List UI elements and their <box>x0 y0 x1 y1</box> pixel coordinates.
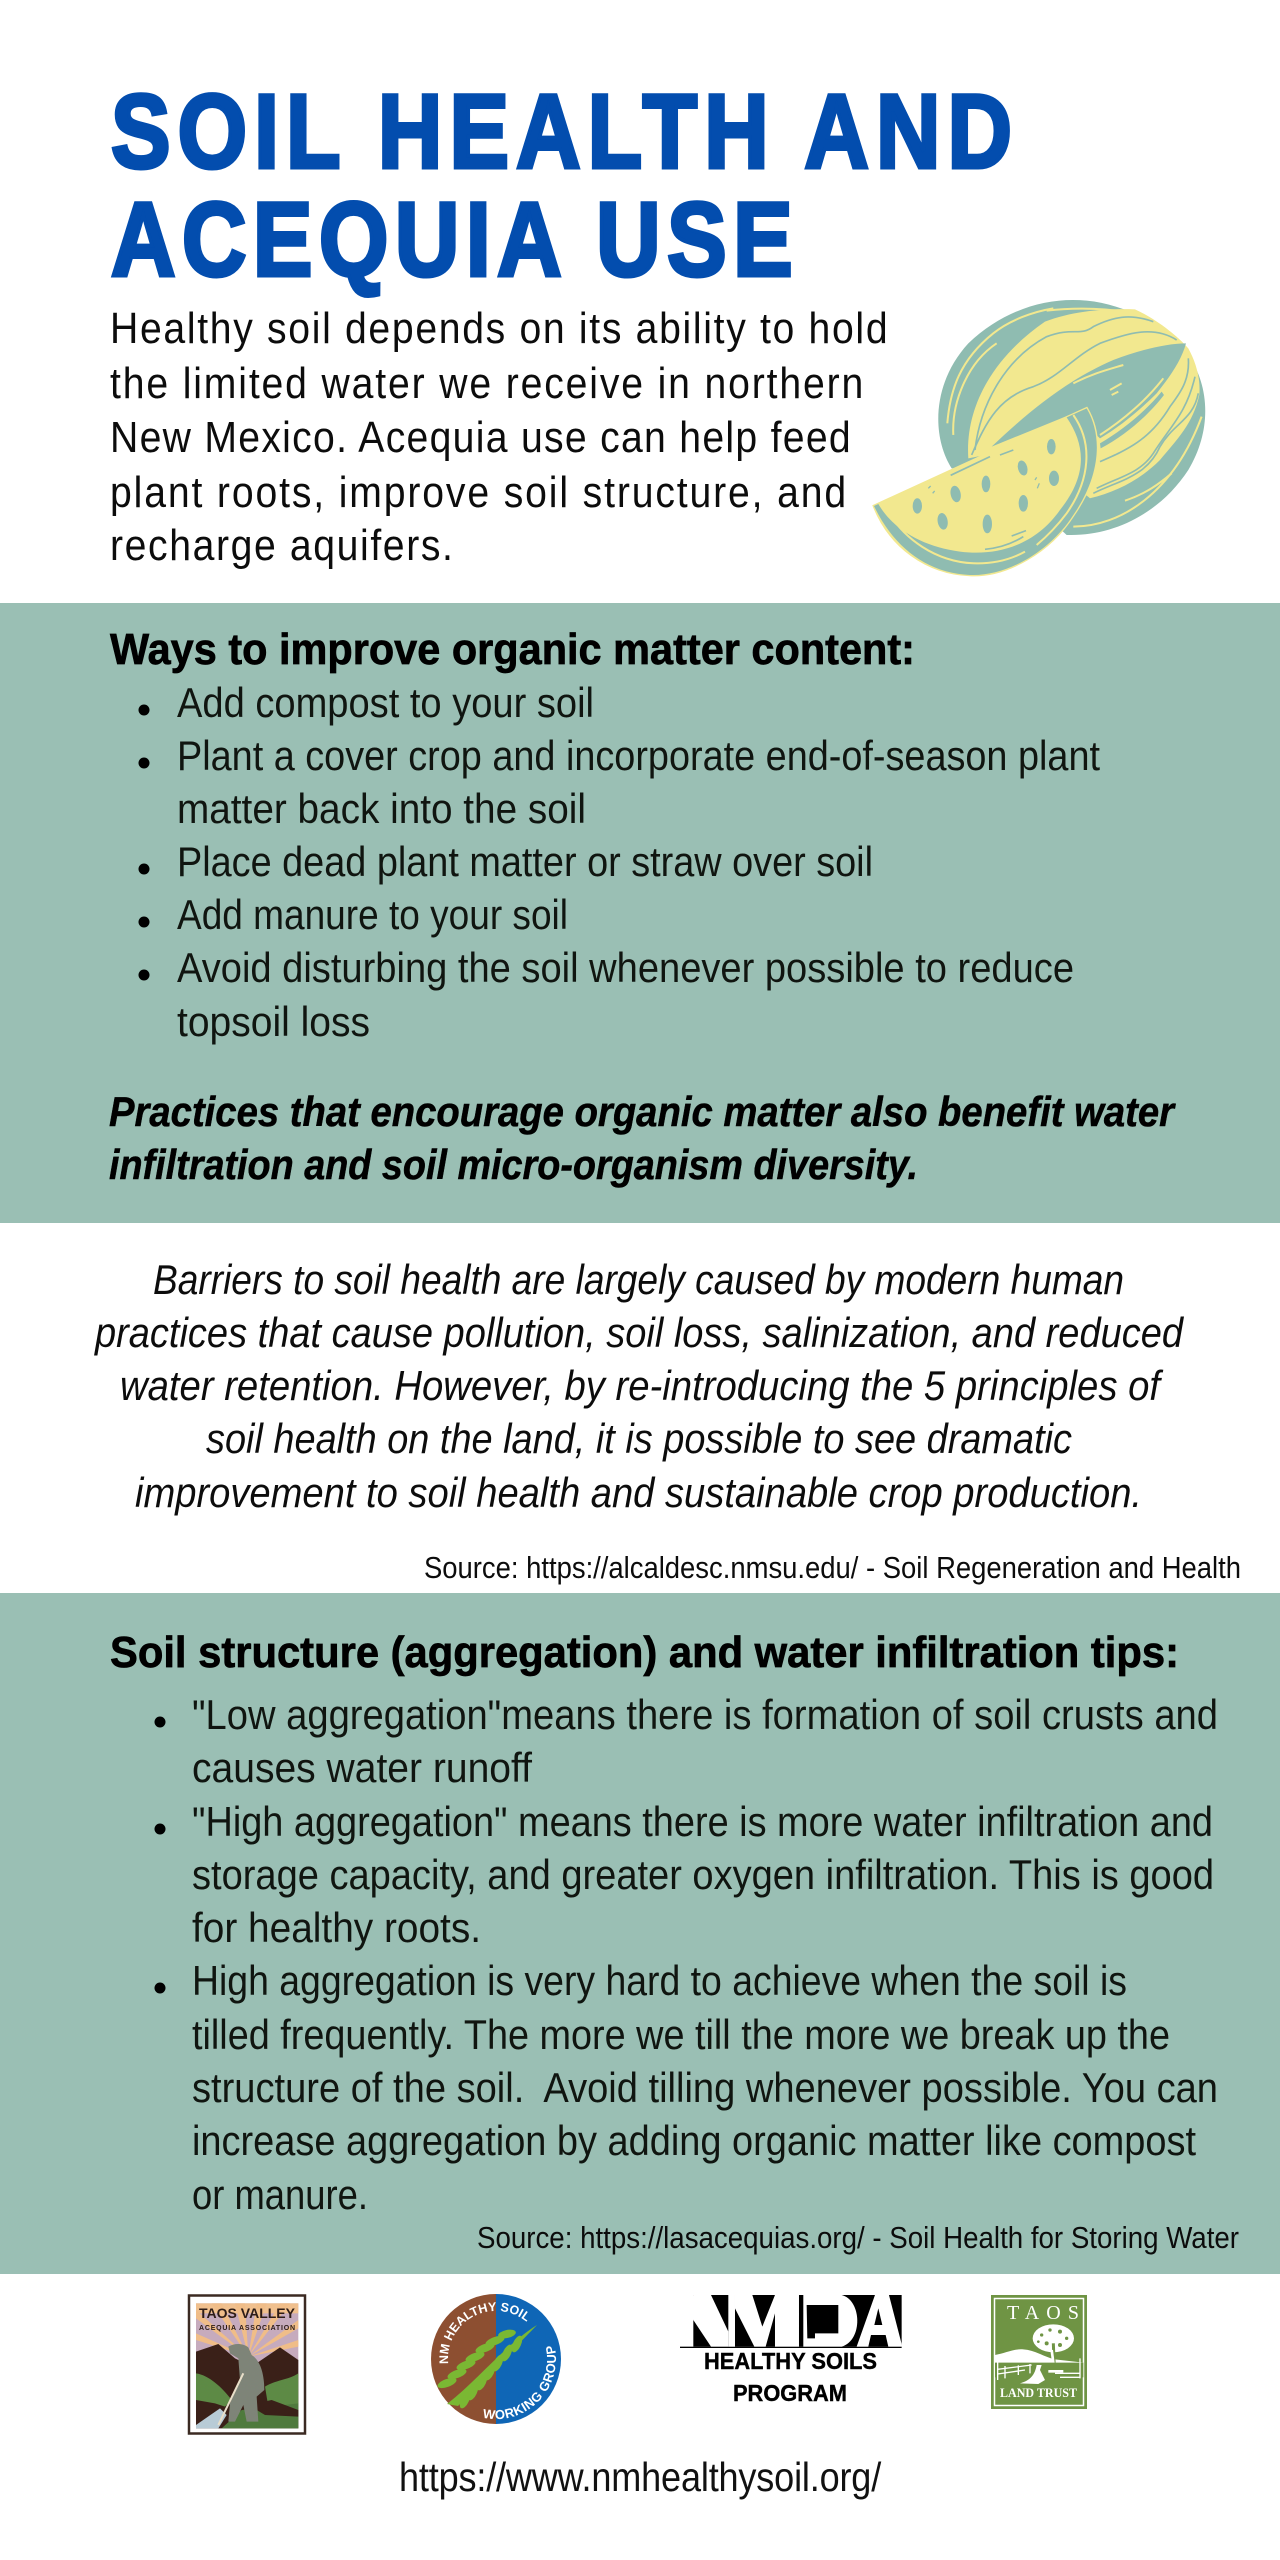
bullet list <box>138 679 1100 1045</box>
barriers paragraph: soil health on the land, it is possible to see dramatic <box>206 1415 1072 1462</box>
bullet list: or manure. <box>192 2171 368 2218</box>
logo: NMDA Healthy Soils Program: PROGRAM <box>733 2380 847 2406</box>
logo: Taos Land Trust: LAND TRUST <box>1000 2385 1077 2400</box>
logo: NM Healthy Soil Working Group: NM HEALTHY SOIL <box>439 2302 528 2364</box>
bullet list: High aggregation is very hard to achieve when the soil is <box>192 1957 1127 2004</box>
bullet list: matter back into the soil <box>177 785 586 832</box>
barriers paragraph: Barriers to soil health are largely caused by modern human <box>153 1256 1124 1303</box>
bullet list: Add compost to your soil <box>177 679 594 726</box>
footer URL: https://www.nmhealthysoil.org/ <box>399 2455 881 2501</box>
panel: organic matter <box>0 603 1280 1223</box>
bold italic note <box>109 1088 1176 1188</box>
logo: NM Healthy Soil Working Group: WORKING GROUP <box>484 2346 556 2420</box>
panel heading: Ways to improve organic matter content: <box>110 625 915 674</box>
logo: Taos Land Trust: TAOS <box>1007 2302 1079 2324</box>
bullet list: increase aggregation by adding organic matter like compost <box>192 2117 1196 2164</box>
bold italic note: infiltration and soil micro-organism diversity. <box>109 1141 918 1188</box>
icon: melon with slice <box>874 300 1205 575</box>
intro text block: the limited water we receive in northern <box>110 359 863 407</box>
logo: Taos Land Trust <box>991 2295 1087 2409</box>
title: SOIL HEALTH AND <box>111 73 1012 190</box>
bold italic note: Practices that encourage organic matter also benefit water <box>109 1088 1176 1135</box>
intro text block: plant roots, improve soil structure, and <box>110 468 846 516</box>
intro text block <box>110 304 888 569</box>
bullet list: Add manure to your soil <box>177 891 568 938</box>
bullet list: tilled frequently. The more we till the more we break up the <box>192 2011 1170 2058</box>
logo: Taos Valley Acequia Association: TAOS VALLEY <box>199 2305 296 2321</box>
logo: NM Healthy Soil Working Group <box>431 2294 561 2424</box>
bullet list: Place dead plant matter or straw over soil <box>177 838 873 885</box>
logo: Taos Valley Acequia Association: ACEQUIA ASSOCIATION <box>199 2325 295 2332</box>
intro text block: Healthy soil depends on its ability to hold <box>110 304 888 352</box>
bullet list: topsoil loss <box>177 998 370 1045</box>
barriers paragraph: water retention. However, by re-introducing the 5 principles of <box>120 1362 1164 1409</box>
title: ACEQUIA USE <box>111 180 793 298</box>
barriers paragraph: improvement to soil health and sustainable crop production. <box>135 1469 1142 1516</box>
logo: Taos Valley Acequia Association <box>189 2296 305 2434</box>
bullet list: Avoid disturbing the soil whenever possible to reduce <box>177 944 1074 991</box>
barriers paragraph <box>93 1256 1184 1516</box>
bullet list: for healthy roots. <box>192 1904 481 1951</box>
bullet list: Plant a cover crop and incorporate end-of-season plant <box>177 732 1100 779</box>
intro text block: New Mexico. Acequia use can help feed <box>110 413 851 461</box>
bullet list: causes water runoff <box>192 1744 532 1791</box>
panel: soil structure <box>0 1593 1280 2274</box>
title <box>111 73 1012 298</box>
bullet list <box>154 1691 1218 2218</box>
panel heading: Soil structure (aggregation) and water infiltration tips: <box>110 1628 1179 1677</box>
barriers paragraph: practices that cause pollution, soil loss, salinization, and reduced <box>93 1309 1184 1356</box>
logo: NMDA Healthy Soils Program <box>680 2295 902 2406</box>
logo: NMDA Healthy Soils Program: HEALTHY SOILS <box>704 2348 877 2374</box>
intro text block: recharge aquifers. <box>110 521 453 569</box>
